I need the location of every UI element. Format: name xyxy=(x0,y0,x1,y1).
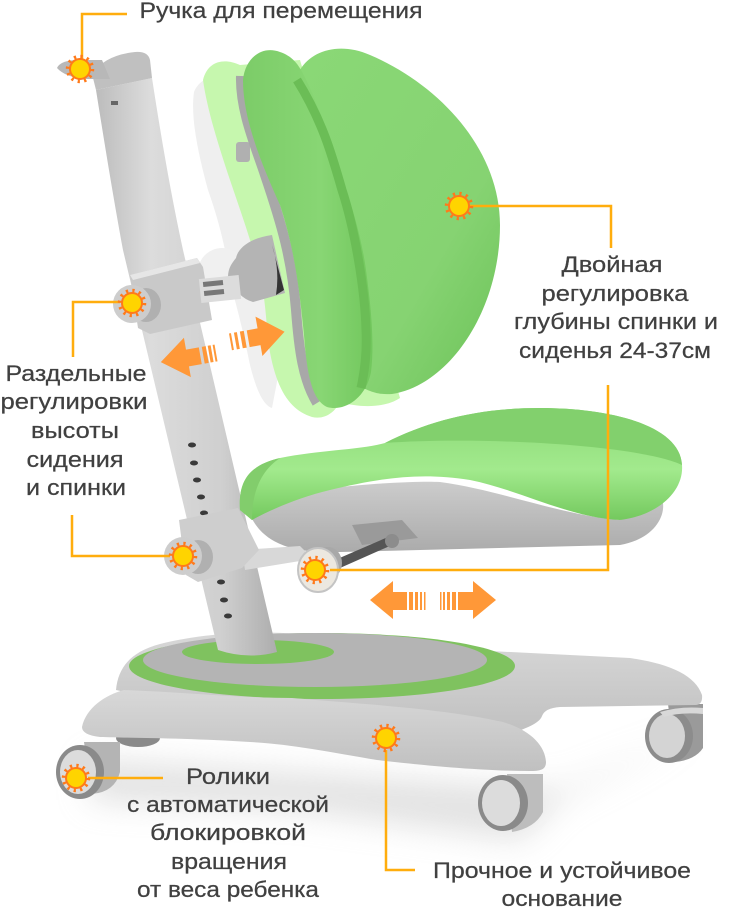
arrows: seat depth xyxy=(370,581,496,619)
green ring xyxy=(129,633,515,699)
seat cushion xyxy=(240,408,682,520)
adjustment holes xyxy=(188,442,232,618)
label: double depth adjustment: глубины спинки и xyxy=(514,309,718,334)
label: separate height adjustments: Раздельные xyxy=(6,361,146,386)
front left caster xyxy=(56,742,120,799)
label: double depth adjustment: Двойная xyxy=(562,252,662,277)
upper knob xyxy=(113,285,161,323)
label: casters: Ролики xyxy=(186,764,270,789)
top slot xyxy=(111,101,118,105)
front base wing xyxy=(82,690,546,771)
label: separate height adjustments: регулировки xyxy=(0,389,148,414)
inner green plate xyxy=(182,640,334,664)
white shell xyxy=(193,78,285,408)
left arrow xyxy=(157,333,219,382)
label: casters: с автоматической xyxy=(127,792,329,817)
left arrow xyxy=(370,581,426,619)
top cap and handle xyxy=(92,52,152,90)
backrest xyxy=(198,49,500,408)
joint ball xyxy=(228,235,285,302)
label: casters: от веса ребенка xyxy=(137,877,320,902)
back base wing xyxy=(116,632,702,735)
label: casters xyxy=(127,764,329,902)
markers xyxy=(64,57,471,790)
marker: lower knob xyxy=(171,544,195,568)
seat top shade xyxy=(385,408,682,465)
label: casters: блокировкой xyxy=(150,820,306,845)
light green pad xyxy=(203,60,400,418)
back lobe xyxy=(300,49,500,394)
label: double depth adjustment: сиденья 24-37см xyxy=(519,338,711,363)
callout lines xyxy=(72,14,611,870)
label: base: Прочное и устойчивое xyxy=(433,858,691,883)
depth knob xyxy=(298,547,342,592)
marker: upper knob xyxy=(120,291,144,315)
joint dark slot xyxy=(272,245,284,295)
grey disc xyxy=(143,633,487,687)
pad seam band xyxy=(297,80,366,388)
floor shadow xyxy=(90,730,700,840)
seat left shade xyxy=(240,458,280,520)
ghost backrest (adjustment position) xyxy=(193,60,400,418)
marker: base xyxy=(374,726,398,750)
right arrow xyxy=(227,312,288,361)
label: base: основание xyxy=(502,886,622,911)
label: separate height adjustments: высоты xyxy=(31,418,119,443)
stud xyxy=(236,142,250,162)
chair base xyxy=(56,632,703,832)
label: separate height adjustments: и спинки xyxy=(26,475,126,500)
upper clamp with rack xyxy=(113,258,241,334)
front right caster xyxy=(478,774,543,832)
marker: caster xyxy=(64,766,88,790)
label: separate height adjustments: сидения xyxy=(26,447,124,472)
marker: depth knob xyxy=(303,558,327,582)
arrows: backrest depth xyxy=(157,312,288,382)
mechanism xyxy=(335,520,418,568)
lower knob xyxy=(164,537,213,575)
label: double depth adjustment xyxy=(514,252,718,363)
rear right caster xyxy=(645,704,703,763)
seat xyxy=(240,408,682,568)
seat shell xyxy=(248,482,663,552)
pole xyxy=(57,52,277,656)
front pad xyxy=(243,50,372,408)
lower clamp xyxy=(164,508,342,592)
rear left caster xyxy=(116,729,160,747)
label: base xyxy=(433,858,691,911)
label: separate height adjustments xyxy=(0,361,148,500)
label: casters: вращения xyxy=(171,849,287,874)
white ball behind joint xyxy=(198,248,246,296)
grey shell xyxy=(241,76,317,403)
marker: backrest xyxy=(447,194,471,218)
marker: handle xyxy=(68,57,92,81)
label: double depth adjustment: регулировка xyxy=(542,281,689,306)
right arrow xyxy=(440,581,496,619)
